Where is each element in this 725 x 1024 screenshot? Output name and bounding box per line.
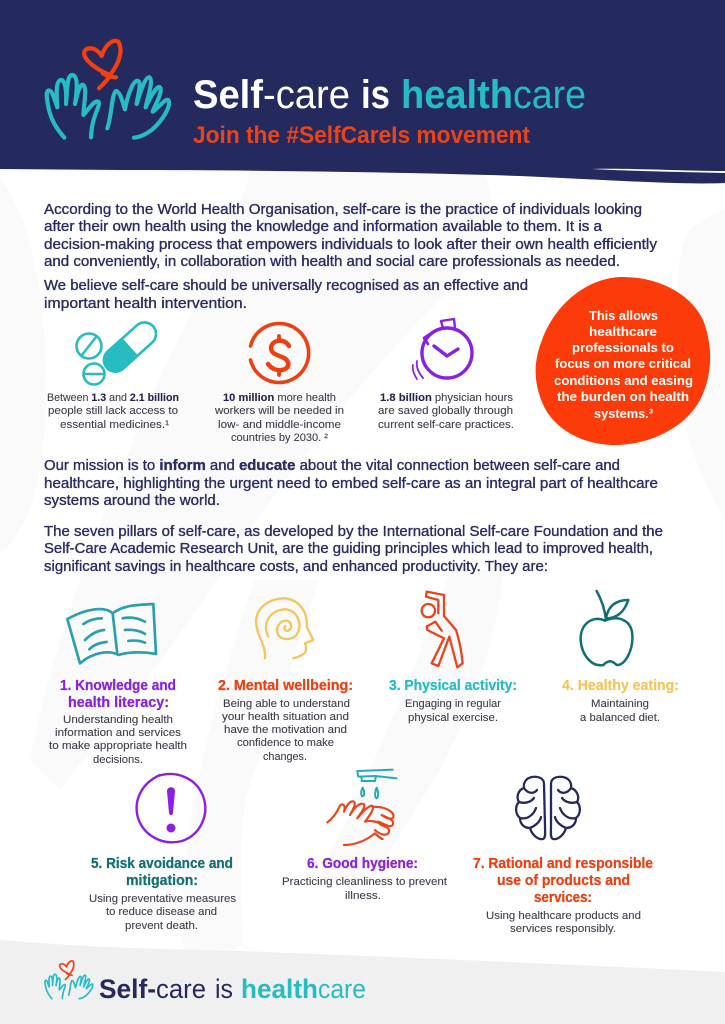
pillar 4 text [562,678,679,724]
mission paragraph [44,458,658,509]
callout bubble: professionals to [572,340,674,355]
title: is [361,73,390,117]
pillar 3 text [389,678,517,724]
pillar 7 text: services responsibly. [510,923,616,935]
icon: dollar [250,324,309,382]
stat: physician hours: 1.8 billion physician hours [380,392,513,404]
pillar 4 text: a balanced diet. [580,712,660,724]
pillar 3 text: 3. Physical activity: [389,678,517,694]
seven pillars paragraph: significant savings in healthcare costs, and enhanced productivity. They are: [44,559,548,575]
callout bubble: focus on more critical [555,356,691,371]
callout bubble: systems.³ [594,406,654,421]
stat: medicines: Between 1.3 and 2.1 billion [47,392,179,404]
pillar 5 text: Using preventative measures [89,893,237,905]
icon: pills [76,318,161,384]
belief statement: important health intervention. [44,296,247,312]
icon: head with spiral [256,598,313,658]
pillar 6 text: 6. Good hygiene: [307,856,418,872]
pillar 1 text: to make appropriate health [49,740,187,752]
pillar 6 text: illness. [345,890,381,902]
intro paragraph: According to the World Health Organisation, self-care is the practice of individuals looking [44,202,642,218]
pillar 6 text [282,856,447,902]
footer wordmark [99,974,366,1004]
stat: physician hours: current self-care practices. [378,419,514,431]
mission paragraph: systems around the world. [44,493,220,509]
pillar 2 text: 2. Mental wellbeing: [218,678,353,694]
stat: medicines: essential medicines.¹ [60,419,169,431]
pillar 1 text [49,678,187,766]
stat: health workers: 10 million more health [223,392,336,404]
callout bubble: the burden on health [557,389,689,404]
pillar 4 text: Maintaining [591,698,649,710]
pillar 1 text: health literacy: [68,695,169,711]
icon: open book [67,604,156,663]
pillar 5 text: to reduce disease and [106,906,217,918]
pillar 5 text [89,856,237,932]
stat: health workers: low- and middle-income [218,419,341,431]
title: -care [263,73,350,117]
title: health [401,73,513,117]
seven pillars paragraph [44,524,663,575]
icon: brain [516,777,580,839]
stat: medicines [47,392,179,431]
seven pillars paragraph: Self-Care Academic Research Unit, are the guiding principles which lead to improved health, [44,541,653,557]
footer wordmark: Self- [99,974,156,1004]
seven pillars paragraph: The seven pillars of self-care, as developed by the International Self-care Foundation and the [44,524,663,540]
stat: medicines: people still lack access to [48,405,178,417]
footer band [0,940,725,1024]
pillar 5 text: mitigation: [126,873,198,889]
icon: stopwatch [413,319,472,379]
belief statement [44,278,528,312]
subtitle: Join the #SelfCareIs movement [193,122,530,149]
belief statement: We believe self-care should be universally recognised as an effective and [44,278,528,294]
pillar 7 text: 7. Rational and responsible [473,856,653,872]
icon: exclamation in circle [137,774,205,842]
icon: apple [581,591,632,665]
pillar 2 text: your health situation and [222,711,349,723]
callout bubble [536,277,710,445]
footer wordmark: care [156,974,206,1004]
stat: health workers: countries by 2030. ² [231,432,328,444]
pillar 3 text: Engaging in regular [405,698,501,710]
mission paragraph: Our mission is to inform and educate about the vital connection between self-care and [44,458,620,474]
pillar 1 text: decisions. [93,754,143,766]
pillar 2 text: confidence to make [237,737,334,749]
stat: health workers [214,392,344,444]
title [193,73,586,117]
icon: stretching person [422,592,463,667]
callout bubble: This allows [589,308,658,323]
intro paragraph: after their own health using the knowledge and information available to them. It is a [44,219,602,235]
logo: hands and heart [47,41,169,138]
footer wordmark: health [241,974,318,1004]
title: care [513,73,586,117]
pillar 7 text: Using healthcare products and [486,910,641,922]
footer wordmark: care [318,974,366,1004]
pillar 2 text [218,678,353,763]
header band [0,0,725,183]
intro paragraph: and conveniently, in collaboration with health and social care professionals as needed. [44,254,620,270]
callout bubble: healthcare [589,324,657,339]
pillar 2 text: changes. [263,751,307,763]
pillar 2 text: have the motivation and [224,724,347,736]
pillar 1 text: 1. Knowledge and [60,678,176,694]
footer logo icon [45,961,93,999]
callout bubble: conditions and easing [554,373,693,388]
pillar 7 text: use of products and [497,873,630,889]
footer wordmark: is [215,974,233,1004]
mission paragraph: healthcare, highlighting the urgent need to embed self-care as an integral part of healthcare [44,476,658,492]
pillar 2 text: Being able to understand [223,698,350,710]
pillar 5 text: prevent death. [125,920,198,932]
intro paragraph: decision-making process that empowers individuals to look after their own health efficiently [44,237,658,253]
pillar 3 text: physical exercise. [408,712,498,724]
pillar 7 text [473,856,653,935]
pillar 7 text: services: [534,890,592,906]
pillar 6 text: Practicing cleanliness to prevent [282,876,447,888]
stat: health workers: workers will be needed in [214,405,344,417]
pillar 5 text: 5. Risk avoidance and [91,856,233,872]
intro paragraph [44,202,658,270]
icon: hand washing [327,770,397,845]
pillar 4 text: 4. Healthy eating: [562,678,679,694]
pillar 1 text: information and services [55,727,182,739]
stat: physician hours: are saved globally through [378,405,513,417]
title: Self [193,73,264,117]
stat: physician hours [378,392,514,431]
pillar 1 text: Understanding health [63,714,173,726]
